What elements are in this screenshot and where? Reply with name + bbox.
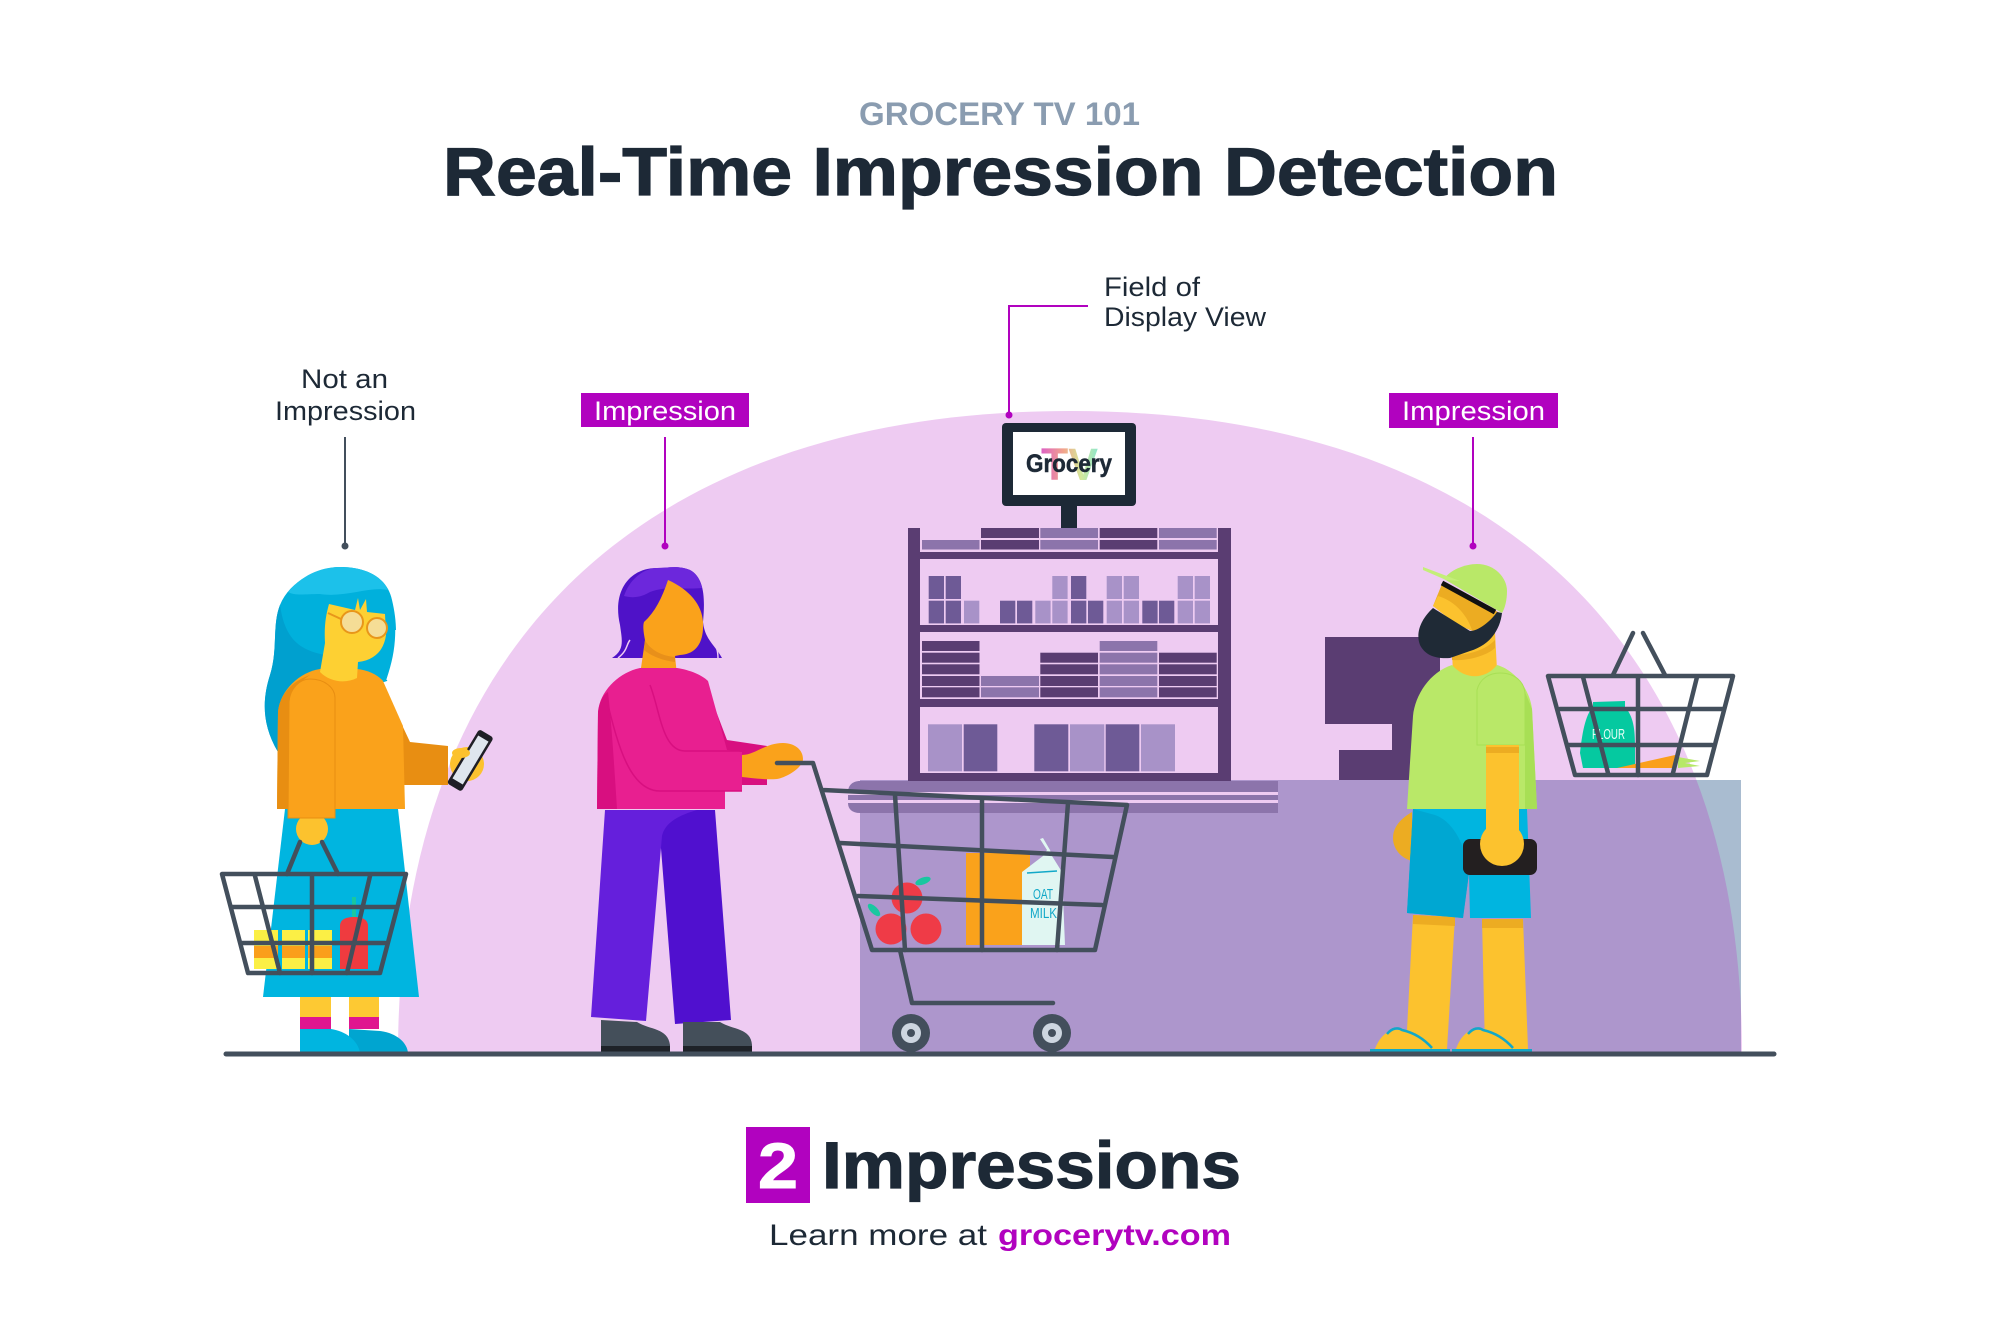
hair: [265, 567, 396, 752]
neck and face: [320, 598, 386, 681]
neck: [1452, 632, 1497, 678]
wheels: [892, 1014, 1071, 1052]
apples: [876, 882, 942, 944]
shorts: [1407, 809, 1531, 918]
label: field of display view: [1006, 272, 1267, 418]
call to action: Learn more at: [769, 1219, 988, 1252]
shopping basket: [222, 842, 406, 973]
shopping cart: [777, 763, 1127, 1052]
display screen: TV: [1041, 439, 1098, 490]
top shelf boxes: [922, 528, 1217, 550]
field of view dome: [398, 411, 1742, 1054]
person 2: impression with cart: [591, 567, 803, 1052]
label: not an impression: Impression: [275, 396, 416, 426]
legs: [1406, 915, 1455, 1049]
bottom shelf boxes: [928, 724, 1175, 771]
head: [1418, 564, 1507, 658]
third shelf boxes: [922, 641, 1217, 697]
label: not an impression: Not an: [301, 364, 388, 394]
label: not an impression: [275, 364, 416, 550]
oat milk carton: [1022, 838, 1065, 945]
skirt: [263, 809, 419, 997]
counter ledge: [848, 781, 1278, 813]
right basket items: [1580, 701, 1700, 768]
second shelf boxes: [929, 576, 1210, 623]
call to action: [769, 1219, 1231, 1252]
t-shirt: [1407, 665, 1537, 809]
title: Real-Time Impression Detection: [443, 134, 1558, 210]
infographic canvas: [220, 102, 1776, 1251]
oat milk carton: MILK: [1030, 905, 1057, 922]
face and neck: [640, 580, 703, 682]
display screen: Grocery: [1026, 450, 1112, 478]
sweater: [277, 669, 405, 809]
label: impression right: Impression: [1402, 396, 1545, 426]
hair: [612, 567, 722, 658]
legs: [300, 997, 331, 1017]
hand: [742, 743, 803, 779]
sleeve: [1477, 673, 1525, 745]
checkout counter: [860, 780, 1741, 1054]
back arm: [395, 710, 448, 785]
impressions count: Impressions: [822, 1128, 1241, 1202]
pants: [591, 810, 731, 1024]
feet and sandals: [1370, 1028, 1532, 1053]
glasses: [328, 611, 387, 638]
boots: [601, 1020, 670, 1052]
label: field of display view: Display View: [1104, 302, 1267, 332]
label: field of display view: Field of: [1104, 272, 1201, 302]
sweater: [597, 668, 742, 809]
orange box: [966, 853, 1030, 945]
shopping cart items: [866, 838, 1065, 945]
shelf unit: [908, 528, 1231, 781]
back arm: [708, 690, 767, 785]
display screen: [1002, 423, 1136, 528]
eyebrow heading: GROCERY TV 101: [859, 96, 1140, 132]
shoes: [349, 1029, 408, 1053]
person 3: impression: [1370, 564, 1733, 1053]
other hand: [1393, 812, 1412, 861]
label: impression right: [1389, 393, 1558, 550]
register: [1325, 637, 1440, 782]
arm and hand: [1463, 745, 1537, 875]
shopping basket items: [254, 897, 368, 969]
oat milk carton: OAT: [1033, 886, 1053, 903]
call to action: grocerytv.com: [998, 1219, 1231, 1252]
label: impression left: [581, 393, 749, 550]
right basket: [1548, 633, 1733, 775]
sleeve and hand: [288, 679, 335, 845]
impressions count: 2: [758, 1130, 798, 1202]
person 1: not an impression: [222, 567, 494, 1053]
floor line: [226, 1052, 1774, 1056]
hand with phone: [447, 729, 494, 792]
right basket items: FLOUR: [1592, 726, 1625, 743]
label: impression left: Impression: [594, 396, 736, 426]
